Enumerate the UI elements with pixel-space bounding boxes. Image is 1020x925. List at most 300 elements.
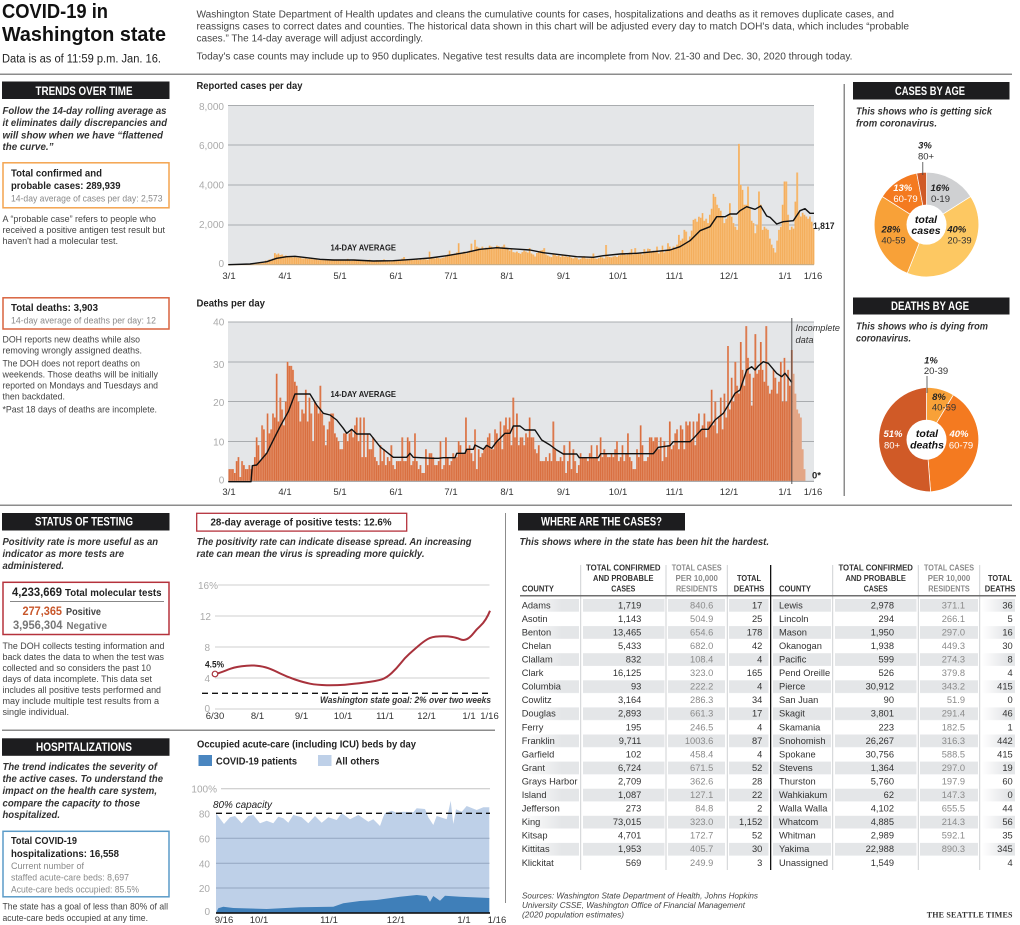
testing note: collected and so considers the past 10: [2, 663, 151, 673]
deaths by age intro: This shows who is dying from: [856, 320, 988, 332]
table rows: left half: 195: [626, 722, 641, 732]
chart: reported cases per day: 4/1: [278, 271, 292, 282]
table header: PER 10,000: [675, 573, 718, 583]
chart: deaths per day: 7/1: [444, 487, 458, 498]
chart: positivity rate: 11/1: [376, 711, 394, 722]
chart: deaths per day: 40: [213, 318, 225, 329]
table rows: left half: Franklin: [522, 736, 555, 746]
chart: positivity rate: 4: [204, 674, 210, 685]
table rows: right half: 274.3: [942, 654, 965, 664]
donut labels: cases by age: 0-19: [931, 194, 950, 205]
line: 14-day average of cases: [228, 206, 814, 265]
callout: hospitalizations total: staffed acute-care beds: 8,697: [11, 872, 129, 882]
chart: deaths per day: 6/1: [389, 487, 403, 498]
callout: test totals: [3, 582, 169, 634]
table rows: left half: 569: [626, 858, 641, 868]
deaths note: The DOH does not report deaths on: [2, 359, 140, 369]
title: [2, 1, 166, 46]
donut labels: deaths by age: deaths: [910, 440, 944, 452]
callout: test totals: Negative: [66, 620, 107, 632]
table rows: right half: 8: [1008, 654, 1013, 664]
date line: Data is as of 11:59 p.m. Jan. 16.: [2, 54, 161, 66]
table rows: right half: 56: [1002, 817, 1013, 827]
cases by age intro: from coronavirus.: [856, 118, 937, 130]
chart: deaths per day: data: [796, 335, 814, 346]
table rows: left half: 4: [757, 749, 762, 759]
heading: cases by age: [853, 82, 1010, 100]
table rows: right half: 5: [1008, 614, 1013, 624]
table rows: left half: 2: [757, 804, 762, 814]
testing note: back dates the data to when the test was: [2, 652, 164, 662]
trends intro: the curve.”: [2, 141, 54, 153]
probable case note: haven't had a molecular test.: [2, 236, 118, 246]
heading: deaths by age: DEATHS BY AGE: [891, 301, 969, 313]
testing note: single individual.: [2, 707, 69, 717]
table header: TOTAL: [737, 573, 761, 583]
table rows: right half: 316.3: [942, 736, 965, 746]
hospitalizations intro: compare the capacity to those: [2, 798, 140, 810]
table rows: left half: 16,125: [613, 668, 641, 678]
positivity intro: The positivity rate can indicate disease spread. An increasing: [196, 536, 472, 548]
probable case note: A “probable case” refers to people who: [2, 214, 156, 224]
table rows: right half: 655.5: [942, 804, 965, 814]
table rows: left half: 2,709: [618, 776, 641, 786]
table rows: left half: 682.0: [690, 641, 713, 651]
chart: deaths per day: 11/1: [666, 487, 683, 498]
callout: 28-day average of positive tests: 28-day average of positive tests: 12.6%: [210, 517, 392, 529]
table rows: right half: 379.8: [942, 668, 965, 678]
chart: reported cases per day: 0: [218, 259, 224, 270]
testing intro: [2, 536, 158, 572]
chart: positivity rate: 1/1: [462, 711, 476, 722]
table rows: left half: 52: [752, 763, 762, 773]
table rows: left half: 34: [752, 695, 762, 705]
panel: trends over time text column: [2, 82, 169, 415]
chart: reported cases per day: 1/16: [804, 271, 822, 282]
chart: deaths per day: 9/1: [557, 487, 570, 498]
table rows: left half: 172.7: [690, 831, 713, 841]
chart: positivity rate: Washington state goal: 2% over two weeks: [320, 695, 491, 706]
donut labels: deaths by age: 20-39: [924, 366, 948, 377]
donut labels: cases by age: 16%: [930, 183, 950, 194]
table rows: left half: 504.9: [690, 614, 713, 624]
table rows: right half: 30,912: [866, 682, 894, 692]
table rows: right half: 1,549: [871, 858, 894, 868]
chart: positivity rate: 16%: [198, 581, 218, 592]
table rows: left half: 165: [747, 668, 762, 678]
table rows: left half: 2,893: [618, 709, 641, 719]
table header: TOTAL CASES: [924, 562, 974, 572]
table rows: right half: 30,756: [866, 749, 894, 759]
table rows: right half: Snohomish: [779, 736, 826, 746]
callout: total deaths: [3, 298, 169, 329]
donut labels: deaths by age: 40%: [948, 429, 969, 440]
table rows: left half: Island: [522, 790, 547, 800]
donut labels: cases by age: cases: [911, 225, 941, 237]
chart: positivity rate: 8/1: [251, 711, 264, 722]
callout: total cases: [3, 163, 169, 208]
table rows: left half: [522, 600, 762, 868]
donut labels: cases by age: total: [915, 214, 938, 226]
table rows: right half: 442: [997, 736, 1013, 746]
table rows: left half: Garfield: [522, 749, 554, 759]
chart: positivity rate: 1/16: [480, 711, 499, 722]
deaths note: then backdated.: [2, 392, 65, 402]
table rows: right half: 588.5: [942, 749, 965, 759]
positivity intro: [196, 536, 472, 560]
table rows: right half: 5,760: [871, 776, 894, 786]
table rows: left half: 93: [631, 682, 641, 692]
chart: reported cases per day: 6,000: [199, 141, 224, 152]
table header: RESIDENTS: [928, 584, 970, 594]
table rows: right half: 266.1: [942, 614, 965, 624]
table rows: left half: 654.6: [690, 627, 713, 637]
callout: hospitalizations total: Current number of: [11, 861, 84, 871]
panel: status of testing: [2, 513, 170, 717]
chart: occupied acute-care beds: Occupied acute-care (including ICU) beds by day: [197, 738, 416, 750]
legend: COVID-19 patients: [216, 756, 297, 768]
chart: deaths per day: 3/1: [222, 487, 236, 498]
table rows: left half: Cowlitz: [522, 695, 552, 705]
positivity intro: rate can mean the virus is spreading more quickly.: [196, 548, 425, 560]
table rows: right half: 449.3: [942, 641, 965, 651]
table rows: left half: 273: [626, 804, 641, 814]
chart: positivity rate: 12/1: [417, 711, 436, 722]
table rows: left half: 102: [626, 749, 641, 759]
donut labels: deaths by age: 40-59: [932, 403, 956, 414]
callout: hospitalizations total: [3, 831, 169, 897]
credit: the seattle times: THE SEATTLE TIMES: [927, 910, 1013, 919]
donut labels: cases by age: 28%: [880, 224, 901, 236]
donut labels: cases by age: 13%: [893, 183, 913, 194]
chart: deaths per day: 12/1: [720, 487, 738, 498]
table rows: right half: Stevens: [779, 763, 813, 773]
chart: deaths per day: 10: [213, 438, 225, 449]
hospital goal note: [2, 902, 168, 923]
table rows: left half: Adams: [522, 600, 551, 610]
table rows: left half: 73,015: [613, 817, 641, 827]
probable case note: [2, 214, 165, 246]
panel: deaths by age: [853, 298, 1010, 492]
table rows: left half: 178: [747, 627, 762, 637]
chart: occupied acute-care beds: 100%: [191, 784, 217, 796]
sources: Sources: Washington State Department of Health, Johns Hopkins: [522, 890, 759, 900]
table rows: left half: Clallam: [522, 654, 553, 664]
testing intro: Positivity rate is more useful as an: [2, 536, 158, 548]
chart: reported cases per day: 1,817: [813, 221, 834, 232]
chart: reported cases per day: 8,000: [199, 102, 224, 113]
table rows: left half: 323.0: [690, 817, 713, 827]
chart: deaths per day: 30: [213, 360, 225, 371]
chart: occupied acute-care beds: 80% capacity: [213, 799, 273, 811]
table rows: right half: 35: [1002, 831, 1013, 841]
chart: occupied acute-care beds: [191, 738, 506, 925]
table rows: right half: 599: [878, 654, 894, 664]
table rows: left half: Klickitat: [522, 858, 554, 868]
chart: reported cases per day: 2,000: [199, 220, 224, 231]
donut labels: cases by age: 60-79: [893, 194, 918, 205]
table rows: left half: 1,143: [618, 614, 641, 624]
table rows: right half: 415: [997, 682, 1013, 692]
hospital goal note: The state has a goal of less than 80% of all: [2, 902, 168, 912]
table rows: left half: 222.2: [690, 682, 713, 692]
panel: hospitalizations: [2, 738, 170, 923]
deaths by age intro: coronavirus.: [856, 332, 911, 344]
donut labels: cases by age: 3%: [918, 140, 932, 152]
table header: COUNTY: [779, 584, 811, 594]
table header: RESIDENTS: [676, 584, 718, 594]
table rows: left half: 25: [752, 614, 762, 624]
donut labels: deaths by age: 8%: [932, 392, 946, 403]
table rows: left half: 87: [752, 736, 762, 746]
chart: reported cases per day: 12/1: [720, 271, 738, 282]
table rows: left half: Douglas: [522, 709, 556, 719]
deaths note: [2, 335, 158, 415]
table rows: right half: 526: [878, 668, 894, 678]
table rows: right half: 46: [1002, 709, 1013, 719]
table rows: right half: Skagit: [779, 709, 805, 719]
table rows: right half: Okanogan: [779, 641, 822, 651]
table rows: right half: Pierce: [779, 682, 805, 692]
table rows: right half: 890.3: [942, 844, 965, 854]
table rows: left half: 6,724: [618, 763, 641, 773]
chart: deaths per day: 1/16: [804, 487, 822, 498]
table rows: left half: 405.7: [690, 844, 713, 854]
callout: total deaths: Total deaths: 3,903: [11, 302, 98, 314]
chart: deaths per day: Incomplete: [796, 323, 840, 334]
table rows: right half: 1: [1008, 722, 1013, 732]
table rows: left half: 4: [757, 654, 762, 664]
hospitalizations intro: The trend indicates the severity of: [2, 761, 158, 773]
deaths note: DOH reports new deaths while also: [2, 335, 140, 345]
sources: University CSSE, Washington Office of Financial Management: [522, 900, 746, 910]
heading: trends over time: TRENDS OVER TIME: [36, 86, 133, 98]
table rows: left half: King: [522, 817, 540, 827]
panel: where are the cases: [518, 513, 1016, 870]
table rows: right half: 343.2: [942, 682, 965, 692]
chart: occupied acute-care beds: 40: [199, 860, 210, 870]
testing intro: indicator as more tests are: [2, 548, 124, 560]
table rows: right half: 2,978: [871, 600, 894, 610]
testing intro: administered.: [2, 560, 64, 572]
table rows: right half: 30: [1002, 641, 1013, 651]
testing note: includes all positive tests performed and: [2, 685, 161, 695]
hospitalizations intro: the active cases. To understand the: [2, 773, 163, 785]
table rows: right half: 297.0: [942, 763, 965, 773]
trends intro: [2, 105, 168, 153]
table rows: right half: 345: [997, 844, 1013, 854]
chart: reported cases per day: 14-DAY AVERAGE: [330, 242, 396, 252]
chart: positivity rate: 9/1: [295, 711, 308, 722]
callout: total cases: probable cases: 289,939: [11, 180, 121, 192]
donut labels: deaths by age: 51%: [883, 429, 903, 440]
table rows: left half: 286.3: [690, 695, 713, 705]
sources: [522, 890, 759, 920]
chart: deaths per day: 0*: [812, 471, 821, 482]
where intro: This shows where in the state has been hit the hardest.: [520, 536, 769, 548]
panel: cases by age: [853, 82, 1010, 277]
donut labels: deaths by age: [883, 355, 973, 452]
chart: occupied acute-care beds: 80: [199, 810, 210, 820]
table rows: left half: Grant: [522, 763, 545, 773]
heading: hospitalizations: HOSPITALIZATIONS: [36, 742, 132, 754]
table rows: left half: 1,719: [618, 600, 641, 610]
donut chart: cases by age: [874, 172, 979, 277]
callout: test totals: 277,365: [22, 606, 63, 618]
deaths note: weekends. Those deaths will be initially: [2, 370, 158, 380]
chart: positivity rate: 4.5%: [205, 660, 224, 670]
table rows: left half: 1,087: [618, 790, 641, 800]
table header: [522, 562, 1015, 594]
table rows: right half: 297.0: [942, 627, 965, 637]
callout: hospitalizations total: Total COVID-19: [11, 835, 77, 847]
table rows: right half: 294: [878, 614, 894, 624]
table rows: left half: 17: [752, 709, 762, 719]
table rows: left half: Kittitas: [522, 844, 550, 854]
chart: positivity rate: 10/1: [334, 711, 352, 722]
table: county data: [520, 562, 1016, 870]
legend: [198, 755, 380, 768]
table rows: right half: 3,801: [871, 709, 894, 719]
table rows: right half: 4,102: [871, 804, 894, 814]
chart: reported cases per day: 3/1: [222, 271, 236, 282]
callout: test totals: 4,233,669: [12, 587, 62, 599]
table rows: left half: 30: [752, 844, 762, 854]
chart: reported cases per day: 9/1: [557, 271, 570, 282]
table rows: right half: 1,950: [871, 627, 894, 637]
chart: deaths per day: 1/1: [778, 487, 792, 498]
table rows: right half: San Juan: [779, 695, 818, 705]
heading: deaths by age: [853, 298, 1010, 314]
table rows: right half: 182.5: [942, 722, 965, 732]
hospitalizations intro: hospitalized.: [2, 809, 60, 821]
chart: positivity rate: 0: [204, 704, 210, 715]
chart: deaths per day: 5/1: [333, 487, 347, 498]
table rows: left half: 1003.6: [685, 736, 713, 746]
table rows: left half: Columbia: [522, 682, 562, 692]
deaths by age intro: [856, 320, 988, 344]
intro text: reassigns cases to correct dates and counties. The historical data shown in this chart will be adjusted every day to match DOH's data, which includes “probable: [196, 22, 909, 32]
table rows: right half: 291.4: [942, 709, 965, 719]
table rows: right half: Whitman: [779, 831, 816, 841]
donut labels: deaths by age: 60-79: [949, 441, 973, 452]
table rows: right half: Walla Walla: [779, 804, 828, 814]
sources: (2020 population estimates): [522, 910, 624, 920]
testing note: [2, 641, 164, 717]
callout: total cases: 14-day average of cases per day: 2,573: [11, 194, 162, 204]
donut chart: deaths by age: [879, 387, 979, 492]
table rows: right half: 214.3: [942, 817, 965, 827]
chart: reported cases per day: 1/1: [778, 271, 792, 282]
title: COVID-19 in: [2, 1, 108, 23]
testing note: may include multiple test results from a: [2, 696, 159, 706]
table rows: right half: 415: [997, 749, 1013, 759]
heading: where are the cases: WHERE ARE THE CASES?: [541, 517, 662, 529]
table rows: right half: 16: [1002, 627, 1013, 637]
trends intro: Follow the 14-day rolling average as: [2, 105, 167, 117]
table rows: right half: 19: [1002, 763, 1013, 773]
table rows: left half: 108.4: [690, 654, 713, 664]
table rows: left half: 9,711: [619, 736, 641, 746]
hospitalizations intro: [2, 761, 163, 821]
table rows: right half: 26,267: [866, 736, 894, 746]
heading: status of testing: [2, 513, 170, 530]
line: 14-day average of deaths: [228, 362, 792, 482]
table header: DEATHS: [985, 584, 1015, 594]
donut labels: cases by age: [880, 140, 972, 246]
table rows: right half: 22,988: [866, 844, 894, 854]
table rows: left half: 13,465: [613, 627, 641, 637]
table rows: right half: 62: [884, 790, 894, 800]
table rows: left half: Chelan: [522, 641, 551, 651]
callout: total deaths: 14-day average of deaths per day: 12: [11, 315, 156, 325]
table header: AND PROBABLE: [845, 573, 906, 583]
table rows: left half: Benton: [522, 627, 551, 637]
chart: deaths per day: 4/1: [278, 487, 292, 498]
table rows: left half: Clark: [522, 668, 544, 678]
chart: reported cases per day: 8/1: [500, 271, 514, 282]
chart: deaths per day: 14-DAY AVERAGE: [330, 389, 396, 399]
table rows: right half: 0: [1008, 695, 1013, 705]
table rows: right half: 4: [1008, 668, 1013, 678]
chart: reported cases per day: Reported cases per day: [196, 80, 303, 92]
table rows: left half: 1,152: [739, 817, 762, 827]
heading: where are the cases: [518, 513, 685, 530]
table rows: left half: 4,701: [618, 831, 641, 841]
chart: reported cases per day: 10/1: [609, 271, 627, 282]
chart: deaths per day: 10/1: [609, 487, 627, 498]
table rows: right half: 90: [884, 695, 894, 705]
table rows: left half: Ferry: [522, 722, 544, 732]
callout: test totals: Total molecular tests: [65, 587, 162, 599]
table rows: left half: 3,164: [618, 695, 641, 705]
table rows: right half: Whatcom: [779, 817, 819, 827]
donut labels: cases by age: 40%: [946, 224, 967, 236]
chart: deaths per day: 0: [219, 476, 225, 486]
table rows: left half: 249.9: [690, 858, 713, 868]
table rows: left half: Grays Harbor: [522, 776, 577, 786]
table rows: left half: 1,953: [618, 844, 641, 854]
testing note: The DOH collects testing information and: [2, 641, 164, 651]
chart: reported cases per day: 6/1: [389, 271, 403, 282]
chart: occupied acute-care beds: 0: [204, 907, 210, 918]
table rows: right half: 4: [1008, 858, 1013, 868]
intro text: Washington State Department of Health updates and cleans the cumulative counts for cases, hospitalizations and deaths as it removes duplicate cases, and: [196, 10, 894, 20]
deaths note: *Past 18 days of deaths are incomplete.: [2, 405, 157, 415]
donut labels: cases by age: 20-39: [947, 236, 972, 246]
table rows: right half: Mason: [779, 627, 807, 637]
table header: PER 10,000: [928, 573, 970, 583]
chart: occupied acute-care beds: 60: [199, 834, 210, 846]
table rows: right half: 223: [878, 722, 894, 732]
table rows: right half: Wahkiakum: [779, 790, 827, 800]
legend: All others: [336, 756, 380, 768]
chart: reported cases per day: [196, 80, 834, 282]
chart: occupied acute-care beds: 20: [199, 884, 210, 895]
table rows: left half: 246.5: [690, 722, 713, 732]
table rows: right half: 147.3: [942, 790, 965, 800]
table rows: left half: 362.6: [690, 776, 713, 786]
table header: TOTAL CONFIRMED: [586, 562, 661, 572]
table header: AND PROBABLE: [593, 573, 654, 583]
table rows: right half: 51.9: [947, 695, 965, 705]
table rows: left half: Jefferson: [522, 804, 560, 814]
donut labels: deaths by age: total: [916, 428, 939, 440]
table rows: right half: Unassigned: [779, 858, 828, 868]
table rows: right half: Pacific: [779, 654, 807, 664]
table rows: left half: 323.0: [690, 668, 713, 678]
table rows: right half: Skamania: [779, 722, 821, 732]
